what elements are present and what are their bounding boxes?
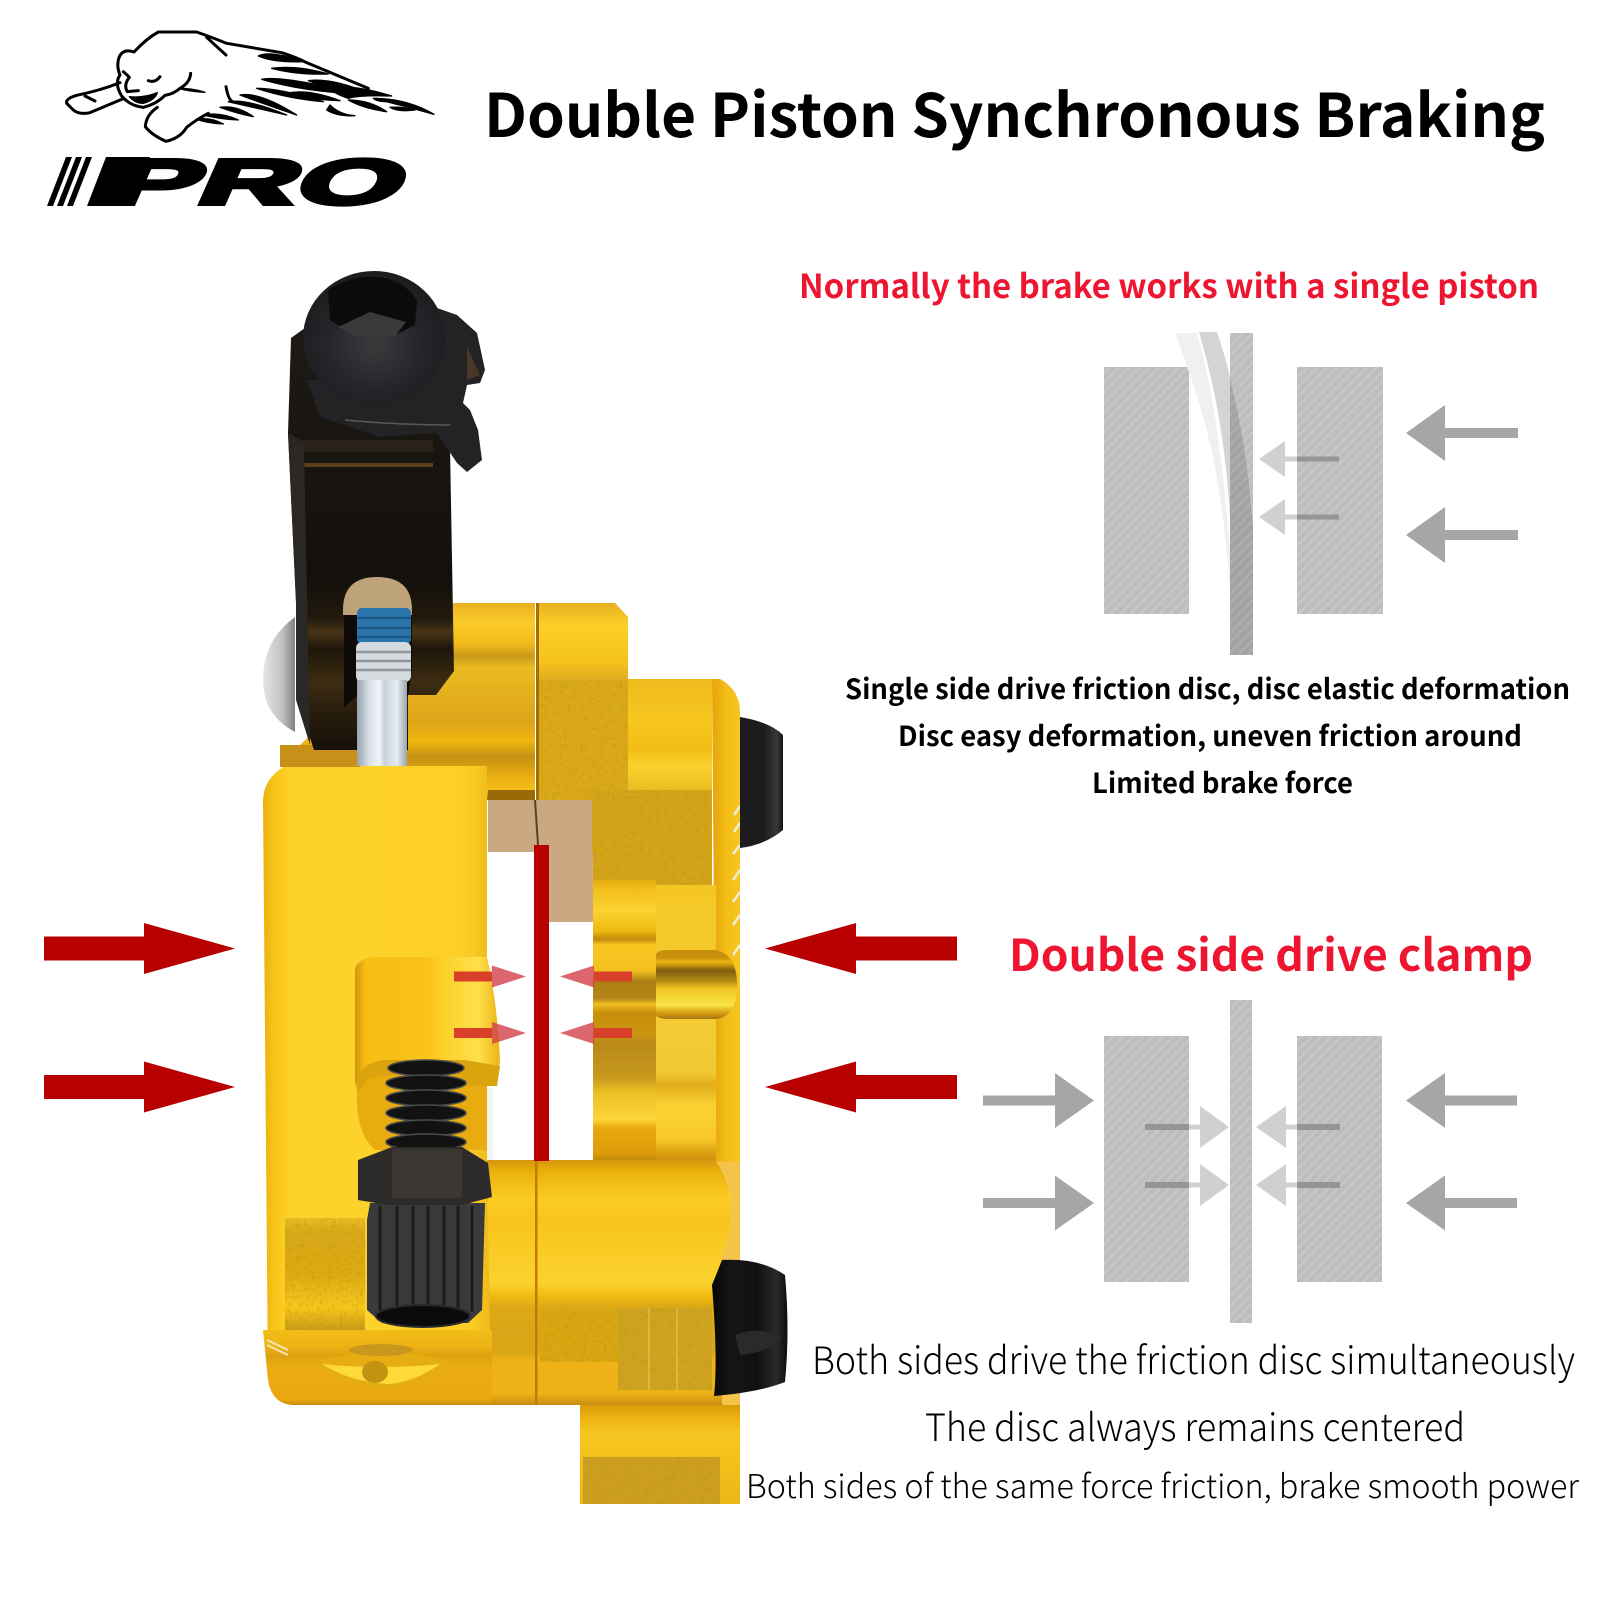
line 2: The disc always remains centered <box>925 1397 1465 1452</box>
main left body <box>263 766 490 1405</box>
piston <box>355 957 500 1086</box>
right brake pad <box>1297 367 1383 614</box>
left brake pad <box>1104 367 1189 614</box>
logo: panther PRO <box>47 32 434 218</box>
strip ticks <box>733 806 740 955</box>
right block <box>592 679 712 885</box>
arm slot <box>344 577 412 708</box>
lower black bolt <box>712 1260 788 1396</box>
knurled adjuster <box>367 1203 485 1327</box>
black threaded screw <box>386 1060 466 1150</box>
right brake pad <box>1297 1036 1382 1282</box>
arrow: right outer top <box>1406 1073 1517 1128</box>
arrow: inner bottom <box>1259 499 1339 535</box>
pin <box>357 680 407 766</box>
icon: panther <box>67 32 434 141</box>
arrow: inner left top <box>1145 1106 1229 1148</box>
seam <box>536 603 539 800</box>
deformed disc <box>1230 378 1253 655</box>
arrow: red right bottom <box>765 1062 957 1112</box>
arrow: inner top <box>1259 441 1339 477</box>
socket floor <box>338 312 406 336</box>
hole centre <box>362 1361 388 1383</box>
arrow: inner right bottom <box>1256 1164 1340 1206</box>
upper black bolt <box>740 717 783 848</box>
brake pad backing <box>488 800 593 922</box>
mounting hole <box>310 1353 455 1388</box>
arrow: red left top <box>44 923 235 974</box>
arrow: red left bottom <box>44 1062 235 1112</box>
arrow: small red inner left bottom <box>454 1022 526 1044</box>
arm top face <box>290 434 433 452</box>
arrow: left outer bottom <box>983 1176 1094 1230</box>
ghost disc mid <box>1199 332 1253 520</box>
title: Double Piston Synchronous Braking <box>484 68 1545 155</box>
heading: double side: Double side drive clamp <box>1009 920 1533 984</box>
arrow: inner left bottom <box>1145 1164 1229 1206</box>
hex socket <box>328 277 417 336</box>
arm side strip <box>288 433 310 745</box>
arrow: outer top <box>1406 405 1518 461</box>
line 2: Disc easy deformation, uneven friction around <box>898 715 1522 755</box>
text: single piston description <box>845 668 1570 802</box>
arrow: small red inner right bottom <box>560 1022 632 1044</box>
silver dome <box>263 617 295 732</box>
caliper photo illustration <box>263 271 788 1504</box>
gold bit beside arm <box>280 745 360 767</box>
black cable arm <box>288 328 454 750</box>
blue thread <box>357 608 411 644</box>
bottom tab <box>580 1405 740 1504</box>
text: double piston description <box>746 1330 1579 1508</box>
line 3: Limited brake force <box>1092 762 1353 802</box>
upper body bright band <box>539 603 628 680</box>
arrow: small red inner right top <box>560 966 632 988</box>
window <box>488 852 593 1160</box>
silver thread <box>356 642 411 682</box>
lower body <box>310 1160 731 1405</box>
piston lip <box>355 1060 500 1092</box>
diagram: double piston <box>983 1000 1517 1323</box>
outer strip <box>712 679 740 1170</box>
bolt head <box>303 271 445 405</box>
upper body textured area <box>539 680 628 800</box>
left brake pad <box>1104 1036 1189 1282</box>
ghost disc light <box>1175 333 1232 590</box>
straight disc <box>1230 333 1253 655</box>
right block texture <box>592 790 712 885</box>
square patch <box>618 1308 712 1390</box>
rear body <box>300 603 535 800</box>
hole highlight <box>322 1364 440 1384</box>
left lower shade patch <box>285 1218 365 1330</box>
red disc line <box>534 845 549 1161</box>
arrow: outer bottom <box>1406 507 1518 563</box>
diagram: single piston <box>1104 332 1518 655</box>
line 3: Both sides of the same force friction, brake smooth power <box>746 1460 1579 1508</box>
pocket shade <box>357 1075 487 1150</box>
tab texture <box>583 1457 720 1504</box>
right piston pin <box>656 950 737 1019</box>
logo wordmark: PRO <box>97 147 421 218</box>
disc <box>1230 1000 1252 1323</box>
lower seam <box>535 1160 538 1405</box>
arrow: left outer top <box>983 1073 1094 1128</box>
piston window edge <box>487 1088 493 1160</box>
arm brown band <box>303 463 433 467</box>
arrow: inner right top <box>1256 1106 1340 1148</box>
column segment A <box>593 880 656 1162</box>
hole ring <box>349 1344 413 1356</box>
column segment B <box>656 885 716 1162</box>
arrow: red right top <box>765 923 957 974</box>
cable clamp hook <box>307 308 485 472</box>
lower outer strip <box>716 1162 740 1405</box>
lip ticks <box>267 1340 288 1355</box>
bottom lip <box>263 1330 492 1405</box>
textured band <box>540 1310 620 1362</box>
arrow: right outer bottom <box>1406 1176 1517 1230</box>
line 1: Single side drive friction disc, disc elastic deformation <box>845 668 1570 708</box>
heading: single piston: Normally the brake works with a single piston <box>799 260 1539 308</box>
hex nut <box>358 1147 492 1205</box>
dark notch above pad <box>488 790 535 800</box>
arm slot tan <box>343 577 412 615</box>
arrow: small red inner left top <box>454 966 526 988</box>
logo speed stripes <box>47 157 150 206</box>
